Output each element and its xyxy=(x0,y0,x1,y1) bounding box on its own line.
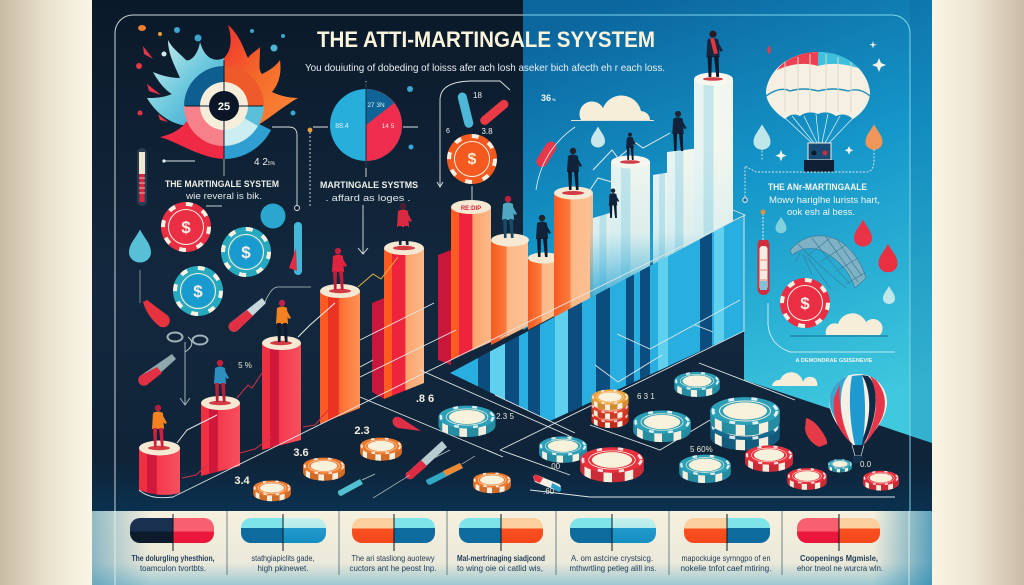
teal dollar chip: $ xyxy=(241,243,251,262)
hot air balloon xyxy=(829,374,887,463)
numeric labels on floor: 5 % xyxy=(238,361,252,370)
red dollar chip xyxy=(161,202,211,252)
numeric labels on floor xyxy=(234,361,872,496)
numeric labels on floor: 6 3 1 xyxy=(637,392,655,401)
figure 7 xyxy=(536,215,551,257)
text block: the anti-martingale: Mowv hariglhe lurists hart, xyxy=(769,195,880,206)
caption 7: ehor tneol ne wurcra wln. xyxy=(797,564,883,573)
rear red blocks xyxy=(372,250,451,399)
capsule orange teal xyxy=(426,456,475,485)
cloud small xyxy=(772,372,817,386)
caption 1: The dolurgling yhesthion, xyxy=(132,554,214,563)
bar 8 xyxy=(528,252,560,330)
bar 2 xyxy=(201,396,240,476)
chip: teal 5 xyxy=(679,455,731,483)
red dollar chip: $ xyxy=(181,218,191,237)
text block: the anti-martingale xyxy=(768,182,880,218)
text block: the anti-martingale: THE ANr-MARTINGAALE xyxy=(768,182,867,192)
pill 4 xyxy=(459,514,543,551)
pie chart xyxy=(330,82,402,168)
text block: the martingale system: wie reveral is bik. xyxy=(185,191,262,201)
frame line over strip xyxy=(115,511,909,585)
caption 7 xyxy=(797,554,883,573)
red cone floor left xyxy=(393,417,421,431)
test tube xyxy=(229,287,311,332)
floating red capsule xyxy=(534,139,559,169)
orange chip: $ xyxy=(468,151,477,168)
trend line: white segments xyxy=(177,133,670,443)
caption strip xyxy=(92,511,932,585)
capsule teal xyxy=(338,474,375,496)
right cream side band xyxy=(932,0,1024,585)
chip: teal 4 xyxy=(539,436,587,463)
bracket numbers: 3.8 xyxy=(481,127,493,136)
thermometer left xyxy=(137,148,147,206)
caption 2: high pkinewet. xyxy=(258,564,308,573)
caption 2 xyxy=(252,554,314,573)
wheel value: 25 xyxy=(218,101,230,113)
rings xyxy=(168,332,208,344)
chip: teal 3 xyxy=(633,410,691,442)
chip: red 2 xyxy=(745,445,793,472)
subtitle: You douiuting of dobeding of loisss afer ach losh aseker bich afecth eh r each loss. xyxy=(305,62,665,74)
pie labels xyxy=(335,102,395,130)
bar chart: martingale rising bars xyxy=(139,72,734,495)
sparkles xyxy=(767,41,886,161)
red cone xyxy=(289,248,297,271)
pie labels: 27 3N xyxy=(367,102,385,109)
caption 1 xyxy=(132,554,214,573)
small caption: A DEMONDRAE GSISENEVIE xyxy=(796,358,873,364)
pill 5 xyxy=(570,514,656,551)
chip: red 3 xyxy=(787,468,827,490)
bracket numbers xyxy=(446,91,493,136)
chip: teal stack xyxy=(710,397,780,450)
blue ball xyxy=(260,204,286,228)
numeric labels on floor: 0.0 xyxy=(860,460,872,469)
drop orange right xyxy=(866,124,882,150)
flame wheel diagram xyxy=(147,25,298,176)
teal dollar chip lower xyxy=(173,266,223,316)
text block: martingale systems xyxy=(320,180,418,204)
caption 2: stathgiapiclits gade, xyxy=(252,554,314,563)
text block: the anti-martingale: ook esh al bess. xyxy=(787,207,855,218)
figure 10 xyxy=(609,188,619,218)
bar 7 xyxy=(491,234,529,345)
curve line right xyxy=(768,303,895,352)
connector lines upper left xyxy=(162,81,510,254)
cyan drop lower xyxy=(883,286,895,304)
value label 4 2: 4 25% xyxy=(254,157,276,168)
numeric labels on floor: .8 6 xyxy=(416,393,434,405)
red drop xyxy=(854,220,872,246)
pie labels: 88.4 xyxy=(335,123,349,130)
figure 8 xyxy=(567,148,582,190)
caption 4 xyxy=(457,554,545,573)
orange chip xyxy=(447,134,497,184)
red dollar chip right xyxy=(780,278,830,328)
caption 6: mapockuige syrnngpo of en xyxy=(682,554,770,563)
bar 1 xyxy=(139,440,180,495)
strip separators xyxy=(227,511,782,575)
arc near capsule xyxy=(536,127,575,190)
teal dollar chip xyxy=(221,227,271,277)
pill 3 xyxy=(352,514,435,551)
caption 5: mthwrtling petleg alill ins. xyxy=(570,564,656,573)
figure 5 xyxy=(397,203,412,245)
blue capsule xyxy=(294,222,302,275)
vertical pointer xyxy=(139,270,141,303)
caption 7: Coopenings Mgmisle, xyxy=(800,554,878,563)
red cone floor right xyxy=(805,418,827,447)
chip: teal small xyxy=(828,459,852,472)
chip: red large xyxy=(580,447,644,482)
cloud right xyxy=(826,313,883,335)
white step bars xyxy=(590,72,734,300)
caption 5 xyxy=(570,554,656,573)
figure 4 xyxy=(332,248,347,290)
numeric labels on floor: 2.3 xyxy=(354,425,370,437)
caption 3: cuctors ant he peost Inp. xyxy=(350,564,436,573)
thermometer right xyxy=(758,210,770,295)
figure 9 xyxy=(626,133,636,160)
pill 6 xyxy=(684,514,770,551)
pill 2 xyxy=(241,514,326,551)
chip: orange 3 xyxy=(360,438,402,461)
bar 4 xyxy=(320,284,360,424)
blue striped reflection below diagonal xyxy=(450,210,750,430)
darker blue right margin xyxy=(910,0,932,443)
red drop lower xyxy=(878,244,898,272)
text block: the martingale system: THE MARTINGALE SYSTEM xyxy=(165,179,279,189)
numeric labels on floor: 2.3 5 xyxy=(496,412,514,421)
text block: martingale systems: . affard as loges . xyxy=(326,193,410,204)
pill 7 xyxy=(797,514,880,551)
blue right panel background xyxy=(523,0,932,443)
caption 6 xyxy=(680,554,772,573)
bar 9 xyxy=(554,186,593,320)
confetti dots near flame xyxy=(136,25,414,150)
figure 2 xyxy=(214,360,229,402)
caption 4: Mal-mertrinaging siadjcond xyxy=(457,554,545,563)
chip: teal 1 xyxy=(438,406,496,437)
figure 3 xyxy=(276,300,291,342)
numeric labels on floor: 5 60% xyxy=(690,445,713,454)
dotted connector right xyxy=(745,147,874,197)
chip: orange stack xyxy=(591,390,629,428)
caption 5: A. om astcine crystsicg. xyxy=(571,554,653,563)
teal dollar chip lower: $ xyxy=(193,282,203,301)
water drop small xyxy=(591,126,605,148)
dark left panel background xyxy=(92,0,932,512)
caption 3: The ari stasliong auotewy xyxy=(352,554,434,563)
value 36: 36 % xyxy=(541,93,556,103)
rounded frame line xyxy=(115,15,910,585)
chip: orange 2 xyxy=(303,458,345,481)
small drop xyxy=(776,217,786,233)
numeric labels on floor: .60 xyxy=(543,487,555,496)
text block: martingale systems: MARTINGALE SYSTMS xyxy=(320,180,418,190)
caption 1: toamculon tvortbts. xyxy=(140,564,206,573)
numeric labels on floor: 3.4 xyxy=(234,475,251,487)
chip: orange 1 xyxy=(253,480,291,501)
chip: orange 4 xyxy=(473,472,511,493)
drop cyan right xyxy=(754,124,770,150)
bar 5 xyxy=(384,241,424,399)
net canopy xyxy=(790,236,866,288)
left cream side band xyxy=(0,0,93,585)
pie labels: 14 5 xyxy=(382,123,395,130)
glass tube left xyxy=(138,337,192,405)
floor grid lines xyxy=(360,300,895,497)
bar 3 xyxy=(262,336,301,450)
caption 4: to wing oie oi catlid wis, xyxy=(457,564,543,573)
capsule red blue xyxy=(533,475,561,492)
red dollar chip right: $ xyxy=(800,294,810,313)
parachute xyxy=(766,52,870,172)
bar 6: RE:DIP xyxy=(461,206,481,212)
blue drop left xyxy=(129,230,151,262)
trend line: low red segments xyxy=(182,373,328,478)
diagonal baseline xyxy=(139,210,745,498)
syringe xyxy=(373,441,450,498)
cloud top xyxy=(571,96,654,121)
trend line: yellow segment xyxy=(358,257,398,287)
chip: red 4 xyxy=(863,471,899,491)
figure 6 xyxy=(502,196,517,238)
chip: teal 2 xyxy=(674,372,720,397)
text block: the martingale system xyxy=(165,179,279,201)
pills above orange chip xyxy=(457,92,510,129)
bar 6 xyxy=(451,200,491,360)
figure 1 xyxy=(152,405,167,447)
figure 11 xyxy=(672,111,687,151)
title: THE ATTI-MARTINGALE SYYSTEM xyxy=(317,27,655,52)
caption 6: nokelie tnfot caef mtiring. xyxy=(680,564,772,573)
red tube left xyxy=(143,300,170,327)
pill 1 xyxy=(130,514,214,551)
bracket numbers: 18 xyxy=(473,91,482,100)
red sash on figure 12 xyxy=(710,38,718,54)
bracket numbers: 6 xyxy=(446,128,450,135)
numeric labels on floor: 3.6 xyxy=(293,447,309,459)
caption 3 xyxy=(350,554,436,573)
shadow line under cloud xyxy=(790,335,888,337)
figure 12 xyxy=(706,31,723,77)
numeric labels on floor: .00 xyxy=(549,462,561,471)
